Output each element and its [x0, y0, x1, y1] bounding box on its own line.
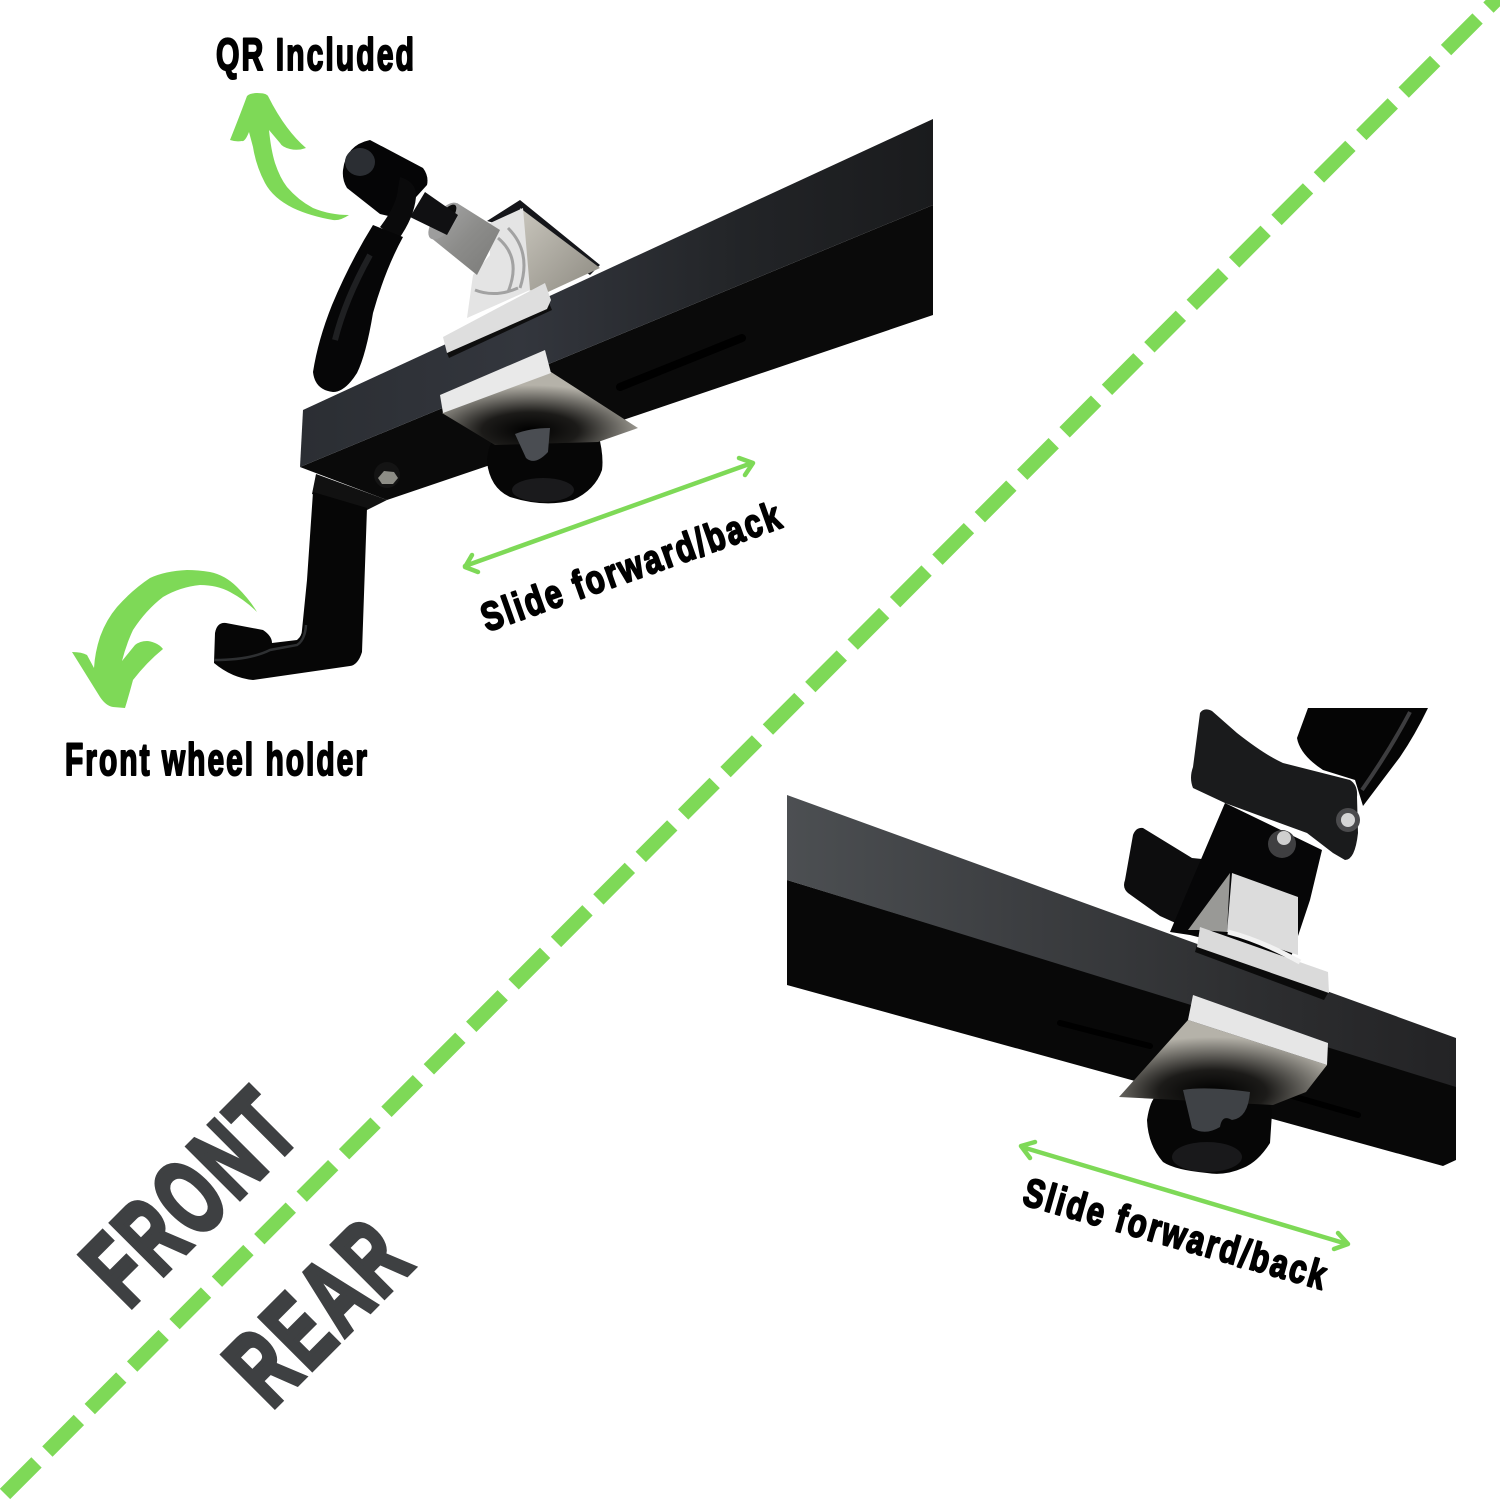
front: lower clamp	[440, 350, 638, 445]
front: clamp block	[467, 200, 600, 318]
rear assembly photo	[787, 708, 1456, 1174]
front: skewer rod	[410, 192, 458, 235]
rear: knob lobes	[1183, 1088, 1250, 1132]
front: threaded sleeve	[423, 198, 500, 275]
front assembly photo	[214, 119, 933, 680]
rear: left wing	[1124, 828, 1212, 925]
front: knob lobe	[515, 428, 550, 461]
rear: lower clamp	[1119, 995, 1328, 1105]
heading: FRONT: FRONT	[61, 1066, 321, 1326]
rear: upper plate	[1195, 927, 1329, 1000]
rear: bolts	[1268, 808, 1360, 858]
curved arrow: front wheel holder	[72, 570, 257, 708]
label: QR Included: QR Included	[216, 29, 416, 80]
rear: adjustment knob	[1147, 1092, 1272, 1174]
front: hex nut	[374, 462, 400, 488]
front: quick release lever	[313, 177, 416, 392]
double arrow: front slide	[465, 458, 753, 572]
rear: black tube	[1170, 803, 1322, 960]
rear: silver tube	[1188, 873, 1298, 955]
front: quick release cam	[343, 140, 428, 218]
heading: REAR: REAR	[204, 1196, 434, 1426]
label: front slide: Slide forward/back	[475, 493, 789, 640]
double arrow: rear slide	[1021, 1142, 1348, 1249]
rear: cast cradle	[1191, 709, 1358, 860]
front: beam	[300, 119, 933, 500]
rear: beam	[787, 795, 1456, 1166]
curved arrow: QR included	[230, 93, 349, 220]
front: upper plate	[443, 283, 552, 358]
label: rear slide: Slide forward/back	[1019, 1170, 1334, 1299]
rear: curved rear wheel arm	[1297, 708, 1428, 806]
label: Front wheel holder: Front wheel holder	[65, 734, 369, 785]
front: adjustment knob	[487, 433, 602, 503]
front wheel holder bracket	[214, 474, 387, 680]
